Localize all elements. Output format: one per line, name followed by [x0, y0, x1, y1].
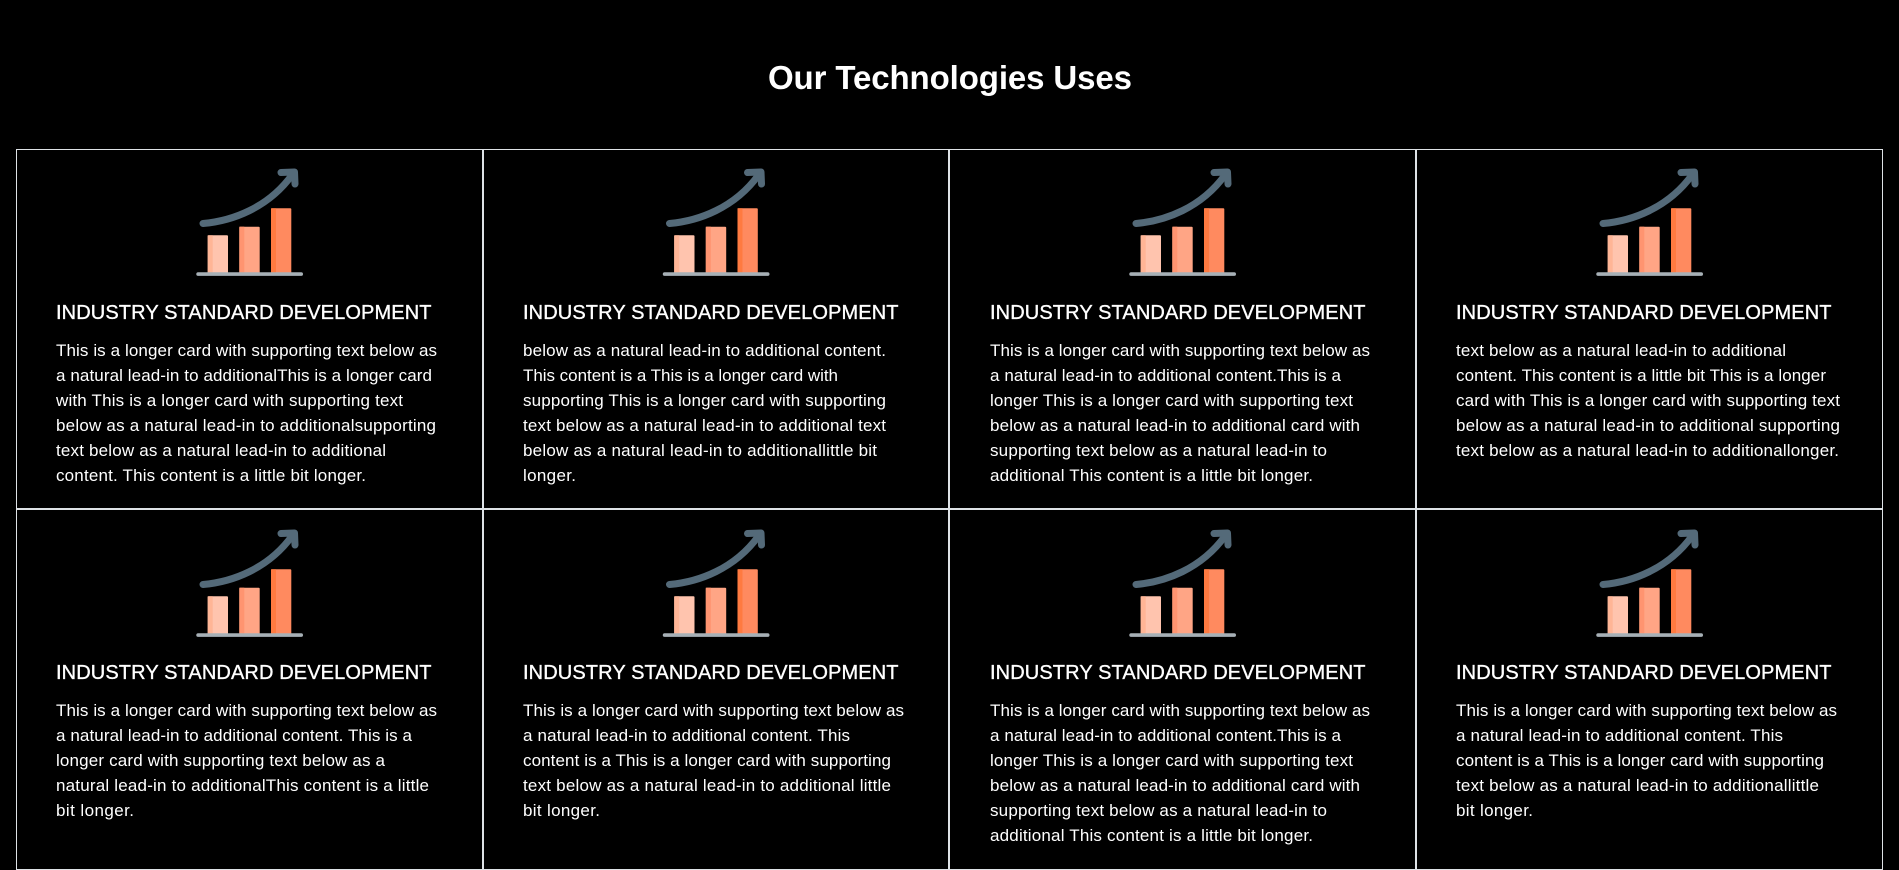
icon: rising bar chart — [1596, 172, 1703, 276]
card body text: text below as a natural lead-in to additional — [1456, 341, 1786, 360]
icon: rising bar chart — [663, 172, 770, 276]
card body text: additional This content is a little bit longer. — [990, 826, 1313, 845]
card body text: below as a natural lead-in to additionalsupporting — [56, 416, 436, 435]
card body text — [990, 341, 1370, 485]
card body text: longer card with supporting text below as a — [56, 751, 386, 770]
card body text: below as a natural lead-in to additional card with — [990, 416, 1360, 435]
card body text: content. This content is a little bit longer. — [56, 466, 366, 485]
card body text: a natural lead-in to additional content.This is a — [990, 366, 1342, 385]
card body text: supporting text below as a natural lead-in to — [990, 801, 1327, 820]
card body text: supporting This is a longer card with supporting — [523, 391, 886, 410]
card heading: INDUSTRY STANDARD DEVELOPMENT — [523, 302, 898, 324]
card body text: text below as a natural lead-in to additionallittle — [1456, 776, 1819, 795]
card body text — [1456, 701, 1837, 820]
card body text: This is a longer card with supporting text below as — [990, 341, 1370, 360]
card body text: This is a longer card with supporting text below as — [56, 341, 437, 360]
card body text: bit longer. — [56, 801, 134, 820]
icon: rising bar chart — [1129, 172, 1236, 276]
card body text: below as a natural lead-in to additional content. — [523, 341, 886, 360]
card body text: longer This is a longer card with supporting text — [990, 391, 1353, 410]
panel: card row 2 column 4 — [1416, 510, 1882, 870]
card heading: INDUSTRY STANDARD DEVELOPMENT — [1456, 662, 1832, 684]
card body text: text below as a natural lead-in to additional little — [523, 776, 891, 795]
panel: card row 1 column 1 — [16, 150, 482, 508]
card body text: longer. — [523, 466, 576, 485]
icon: rising bar chart — [1596, 533, 1703, 637]
card body text: a natural lead-in to additional content. This — [523, 726, 850, 745]
card body text: content is a This is a longer card with supporting — [523, 751, 891, 770]
card body text: bit longer. — [523, 801, 600, 820]
panel: card row 1 column 2 — [484, 150, 948, 508]
card body text: below as a natural lead-in to additional card with — [990, 776, 1360, 795]
card heading: INDUSTRY STANDARD DEVELOPMENT — [990, 662, 1366, 684]
card body text: bit longer. — [1456, 801, 1533, 820]
card body text: This is a longer card with supporting text below as — [56, 701, 437, 720]
card heading: INDUSTRY STANDARD DEVELOPMENT — [523, 662, 898, 684]
card body text: content. This content is a little bit This is a longer — [1456, 366, 1826, 385]
icon: rising bar chart — [196, 533, 303, 637]
card body text — [523, 701, 904, 820]
panel: card row 2 column 3 — [950, 510, 1416, 870]
card body text: below as a natural lead-in to additional supporting — [1456, 416, 1840, 435]
card body text: content is a This is a longer card with supporting — [1456, 751, 1824, 770]
card body text: a natural lead-in to additional content.This is a — [990, 726, 1342, 745]
card body text: longer This is a longer card with supporting text — [990, 751, 1353, 770]
card body text: additional This content is a little bit longer. — [990, 466, 1313, 485]
card body text: below as a natural lead-in to additionallittle bit — [523, 441, 877, 460]
card body text: with This is a longer card with supporting text — [55, 391, 403, 410]
panel: card row 2 column 1 — [16, 510, 482, 870]
card body text: text below as a natural lead-in to additional text — [523, 416, 886, 435]
card body text: text below as a natural lead-in to additional — [56, 441, 386, 460]
card body text: This is a longer card with supporting text below as — [523, 701, 904, 720]
panel: card row 1 column 4 — [1416, 150, 1882, 508]
card body text: a natural lead-in to additionalThis is a longer card — [56, 366, 432, 385]
title: Our Technologies Uses — [768, 59, 1132, 96]
card body text: This content is a This is a longer card with — [523, 366, 838, 385]
card heading: INDUSTRY STANDARD DEVELOPMENT — [56, 302, 432, 324]
card body text: This is a longer card with supporting text below as — [1456, 701, 1837, 720]
card body text — [523, 341, 886, 485]
panel: card row 2 column 2 — [484, 510, 948, 870]
card body text: a natural lead-in to additional content. This is a — [56, 726, 413, 745]
icon: rising bar chart — [196, 172, 303, 276]
card body text: supporting text below as a natural lead-in to — [990, 441, 1327, 460]
card body text: text below as a natural lead-in to additionallonger. — [1456, 441, 1839, 460]
card heading: INDUSTRY STANDARD DEVELOPMENT — [990, 302, 1366, 324]
panel: card row 1 column 3 — [950, 150, 1416, 508]
card body text: natural lead-in to additionalThis content is a little — [56, 776, 429, 795]
card body text: a natural lead-in to additional content. This — [1456, 726, 1783, 745]
card body text — [55, 341, 437, 485]
card body text — [990, 701, 1370, 845]
card heading: INDUSTRY STANDARD DEVELOPMENT — [56, 662, 432, 684]
icon: rising bar chart — [1129, 533, 1236, 637]
card body text: This is a longer card with supporting text below as — [990, 701, 1370, 720]
icon: rising bar chart — [663, 533, 770, 637]
card body text: card with This is a longer card with supporting text — [1456, 391, 1840, 410]
card body text — [1456, 341, 1840, 460]
card body text — [56, 701, 437, 820]
card heading: INDUSTRY STANDARD DEVELOPMENT — [1456, 302, 1832, 324]
